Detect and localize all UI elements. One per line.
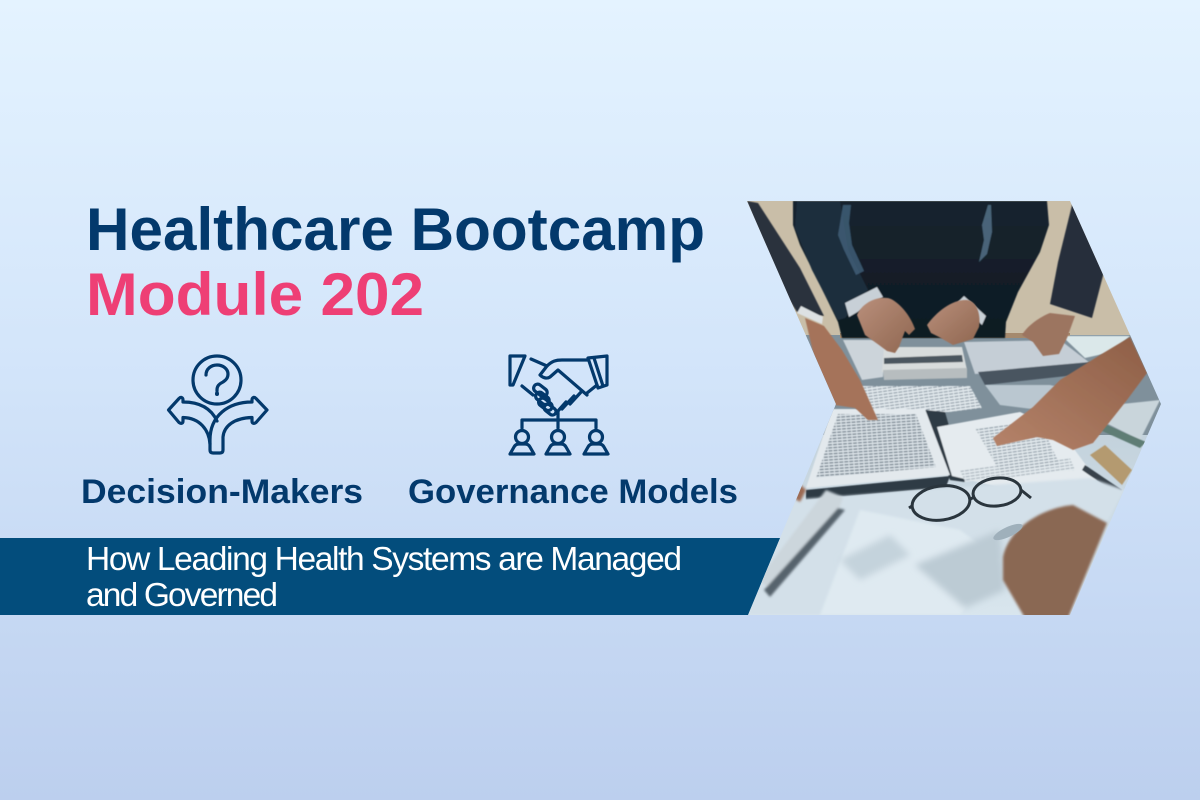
photo wall and table base [740, 195, 1170, 620]
icon: handshake over three people [510, 356, 608, 454]
title: Module 202 [86, 261, 424, 328]
subtitle: How Leading Health Systems are Managed [86, 541, 682, 578]
banner: subtitle strip [0, 538, 790, 615]
icon: decision arrows with question mark [168, 356, 267, 453]
photo: hand in foreground [991, 505, 1107, 618]
photo: eyeglasses [909, 476, 1031, 524]
label: Decision-Makers: Decision-Makers [81, 473, 363, 511]
title: Healthcare Bootcamp [86, 196, 705, 263]
photo: lower sheets [748, 478, 1125, 615]
subtitle [86, 541, 682, 614]
photo: back hands [857, 298, 1075, 356]
photo: documents [806, 385, 1160, 500]
photo: pen [758, 484, 845, 597]
photo: pointing hand left [805, 318, 878, 420]
photo: hands over documents on a table, cut as a chevron [740, 195, 1170, 620]
subtitle: and Governed [86, 577, 278, 614]
title [86, 196, 705, 328]
photo: blurred paper patches [840, 530, 1005, 608]
photo: pointing hand right [993, 337, 1147, 450]
photo: suited figures [747, 201, 1105, 338]
photo: open books [843, 336, 1130, 385]
label: Governance Models: Governance Models [408, 473, 738, 511]
